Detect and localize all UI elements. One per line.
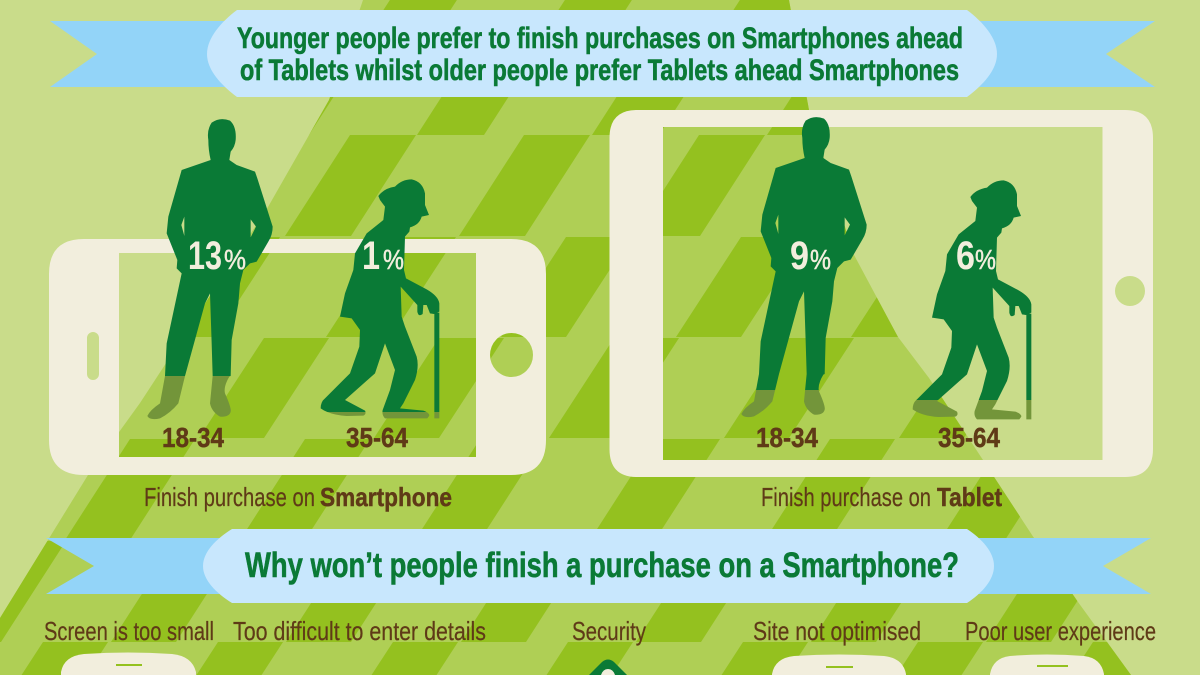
stat: 13 percent: % — [224, 244, 246, 275]
second banner — [46, 529, 1151, 603]
second banner heading: Why won’t people finish a purchase on a Smartphone? — [245, 546, 959, 585]
reason label: screen is too small: Screen is too small — [44, 616, 214, 646]
top banner heading: of Tablets whilst older people prefer Tablets ahead Smartphones — [240, 54, 959, 87]
top banner heading — [237, 22, 963, 87]
stat: 1 percent — [362, 234, 404, 278]
stat: 6 percent — [956, 234, 996, 278]
smartphone frame — [49, 239, 546, 475]
stat: 1 percent: % — [383, 244, 404, 275]
ribbon behind second banner — [46, 538, 1151, 594]
stat: 9 percent: 9 — [790, 234, 809, 278]
caption: finish purchase on smartphone: Finish purchase on — [144, 482, 315, 512]
reason label: site not optimised: Site not optimised — [753, 616, 921, 646]
age label: 35-64 tablet: 35-64 — [938, 422, 1000, 453]
top banner — [50, 10, 1155, 97]
icon: phone, poor user experience — [990, 654, 1104, 675]
age label: 18-34 smartphone: 18-34 — [162, 422, 224, 453]
icon: phone, screen too small — [61, 652, 196, 675]
figure: older person on tablet — [913, 180, 1031, 419]
stat: 9 percent — [790, 234, 831, 278]
stat: 9 percent: % — [810, 244, 831, 275]
age label: 35-64 smartphone: 35-64 — [346, 422, 408, 453]
figure: young man on smartphone — [147, 119, 273, 419]
icon: security shield — [589, 660, 627, 675]
icon: phone, site not optimised — [772, 654, 906, 675]
stat: 6 percent: % — [975, 244, 996, 275]
caption: finish purchase on tablet: Finish purchase on — [761, 482, 931, 512]
ribbon behind top banner — [50, 21, 1155, 87]
stat: 1 percent: 1 — [362, 234, 380, 278]
reason label: too difficult to enter details: Too difficult to enter details — [233, 616, 486, 646]
top banner heading: Younger people prefer to finish purchases on Smartphones ahead — [237, 22, 963, 55]
stat: 6 percent: 6 — [956, 234, 975, 278]
reason label: security: Security — [572, 616, 646, 646]
stat: 13 percent: 13 — [188, 234, 222, 278]
top banner bubble — [207, 10, 997, 97]
figure: young man on tablet — [741, 117, 867, 417]
caption: finish purchase on smartphone: Smartphone — [320, 482, 452, 512]
second banner bubble — [203, 529, 994, 603]
figure: older person on smartphone — [321, 179, 439, 418]
age label: 18-34 tablet: 18-34 — [756, 422, 818, 453]
caption: finish purchase on tablet: Tablet — [937, 482, 1002, 512]
tablet frame — [610, 110, 1153, 477]
